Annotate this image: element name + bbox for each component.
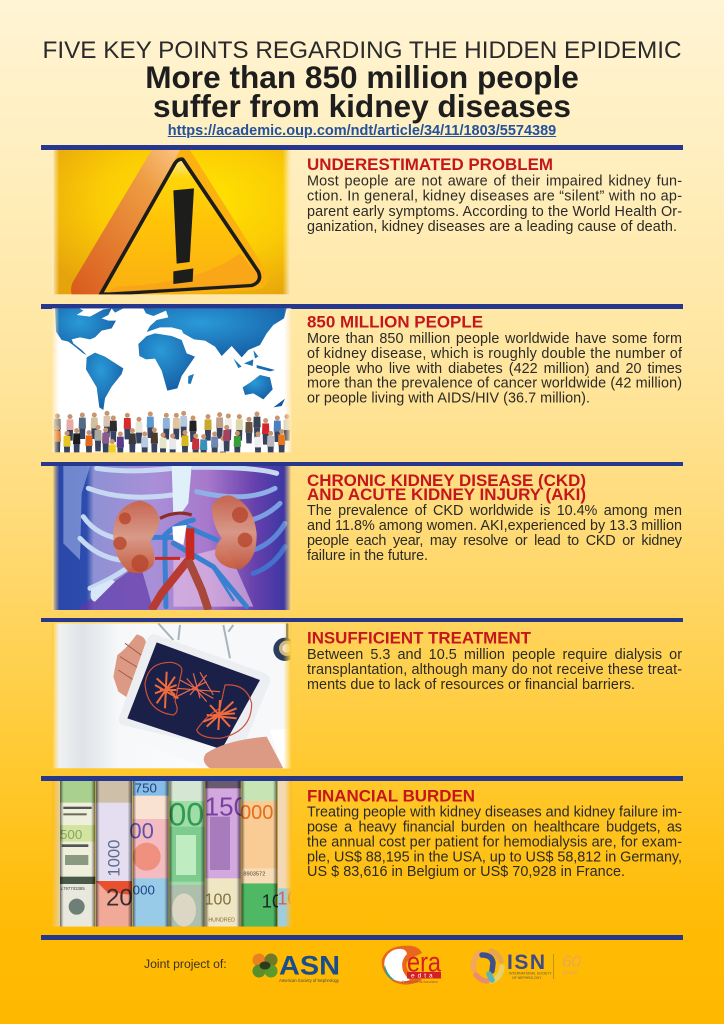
panel text: financial burden: pose a heavy financial burden on healthcare budgets, as [307,820,682,836]
banknote roll 1 [60,781,95,927]
panel text: 850 million people: of kidney disease, which is roughly double the number of [307,346,683,362]
banknote roll 5: HUNDRED [208,918,235,924]
logo: ASN [252,950,340,983]
icon: exclamation mark [173,188,194,284]
banknote roll 2: 1000 [104,840,123,877]
source link: https://academic.oup.com/ndt/article/34/11/1803/5574389 [168,123,556,139]
doctor coat [160,623,290,768]
panel text: financial burden: the annual cost per patient for hemodialysis are, for exam- [307,835,682,851]
logo: ERA-EDTA: edta [411,973,436,980]
panel text: underestimated problem: ganization, kidney diseases are a leading cause of death. [307,219,677,235]
banknote roll 6 [240,781,278,927]
banknote roll 4 [169,781,205,927]
panel text: insufficient treatment: INSUFFICIENT TREATMENT [307,630,531,648]
panel text: 850 million people: people who live with diabetes (422 million) and 20 times [307,361,682,377]
panel text: insufficient treatment: transplantation, although many do not receive these treat- [307,662,682,678]
panel text: CKD and AKI [307,472,683,564]
panel text: underestimated problem: Most people are not aware of their impaired kidney fun- [307,174,682,190]
headline: More than 850 million people [145,59,579,95]
panel text: CKD and AKI: people each year, may resolve or lead to CKD or kidney [307,533,683,549]
headline: suffer from kidney diseases [153,88,571,124]
banknote roll 6: 000 [240,802,273,824]
panel text: 850 million people: or people living with AIDS/HIV (36.7 million). [307,390,590,406]
panel text: insufficient treatment: Between 5.3 and 10.5 million people require dialysis or [307,647,682,663]
banknote roll 5 [205,781,242,927]
panel text: 850 million people [307,314,683,406]
panel text: CKD and AKI: CHRONIC KIDNEY DISEASE (CKD) [307,472,586,490]
banknote roll 5: 150 [205,792,248,822]
logo: ISN: OF NEPHROLOGY [512,976,542,980]
banknote roll 3: 750 [135,780,157,795]
panel text: financial burden: Treating people with kidney diseases and kidney failure im- [307,805,682,821]
crowd of people [54,410,290,452]
panel text: underestimated problem: parent early symptoms. According to the World Health Or- [307,204,682,220]
panel text: 850 million people: 850 MILLION PEOPLE [307,314,483,332]
banknote roll 4: 100 [151,797,204,833]
icon: warning triangle side [71,150,188,294]
logo: ISN: years [562,970,579,976]
stethoscope [273,623,290,661]
banknote roll 6: 10 [262,891,282,912]
banknote roll 2 [96,781,133,927]
banknote roll 3: 00 [129,818,154,843]
footer: joint project label: Joint project of: [144,957,227,971]
panel text: financial burden: US $ 83,616 in Belgium or US$ 70,928 in France. [307,864,625,880]
icon: right kidney [212,495,257,569]
panel image: world map and crowd [52,308,292,452]
panel text: underestimated problem [307,156,682,235]
arteries [152,513,208,610]
banknote roll 3: 000 [133,882,155,897]
panel text: underestimated problem: UNDERESTIMATED PROBLEM [307,156,553,174]
icon: kidneys on tablet [145,662,252,738]
panel text: 850 million people: More than 850 million people worldwide have some form [307,331,682,347]
panel image: rolled banknotes [52,781,292,927]
panel text: insufficient treatment [307,630,682,693]
right hand [204,737,283,768]
spine [172,466,192,515]
panel image: warning triangle [52,150,291,294]
headline [145,59,579,124]
world map [55,308,287,410]
logo: ISN: 60 [562,952,581,971]
panel text: insufficient treatment: ments due to lack of resources or financial barriers. [307,677,635,693]
logo: ISN: INTERNATIONAL SOCIETY [509,972,552,976]
panel text: financial burden [307,788,682,880]
logo: ASN: American Society of Nephrology [279,978,340,983]
tablet [119,634,270,751]
icon: left kidney [113,501,159,573]
panel text: CKD and AKI: failure in the future. [307,548,428,564]
panel text: underestimated problem: ction. In general, kidney diseases are “silent” with no ap- [307,188,682,204]
banknote roll 7: 10 [277,888,297,908]
logo: ASN: ASN [279,950,340,980]
banknote roll 6: 8903572 [243,872,265,878]
icon: warning triangle face [101,159,260,294]
banknote roll 2: 20 [106,885,133,912]
panel text: CKD and AKI: and 11.8% among women. AKI,experienced by 13.3 million [307,518,682,534]
panel text: financial burden: ple, US$ 88,195 in the USA, up to US$ 58,812 in Germany, [307,850,682,866]
banknote roll 1: 500 [60,827,82,842]
title: FIVE KEY POINTS REGARDING THE HIDDEN EPIDEMIC [42,37,682,64]
panel text: CKD and AKI: AND ACUTE KIDNEY INJURY (AKI) [307,486,586,504]
left hand [113,634,147,698]
panel text: 850 million people: more than the prevalence of cancer worldwide (42 million) [307,376,682,392]
banknote roll 7 [278,781,292,927]
logo: ERA-EDTA [382,946,441,985]
panel image: kidneys anatomy [52,466,292,610]
logo: ISN [470,948,581,984]
panel text: financial burden: FINANCIAL BURDEN [307,788,475,806]
banknote roll 5: 100 [205,891,231,908]
panel text: CKD and AKI: The prevalence of CKD worldwide is 10.4% among men [307,503,682,519]
banknote roll 3 [129,780,169,927]
veins [152,520,247,607]
ribs [80,467,285,588]
banknote roll 1: L797703385 [61,886,85,891]
panel image: doctor holding tablet [52,623,292,768]
logo: ISN: ISN [507,951,545,974]
